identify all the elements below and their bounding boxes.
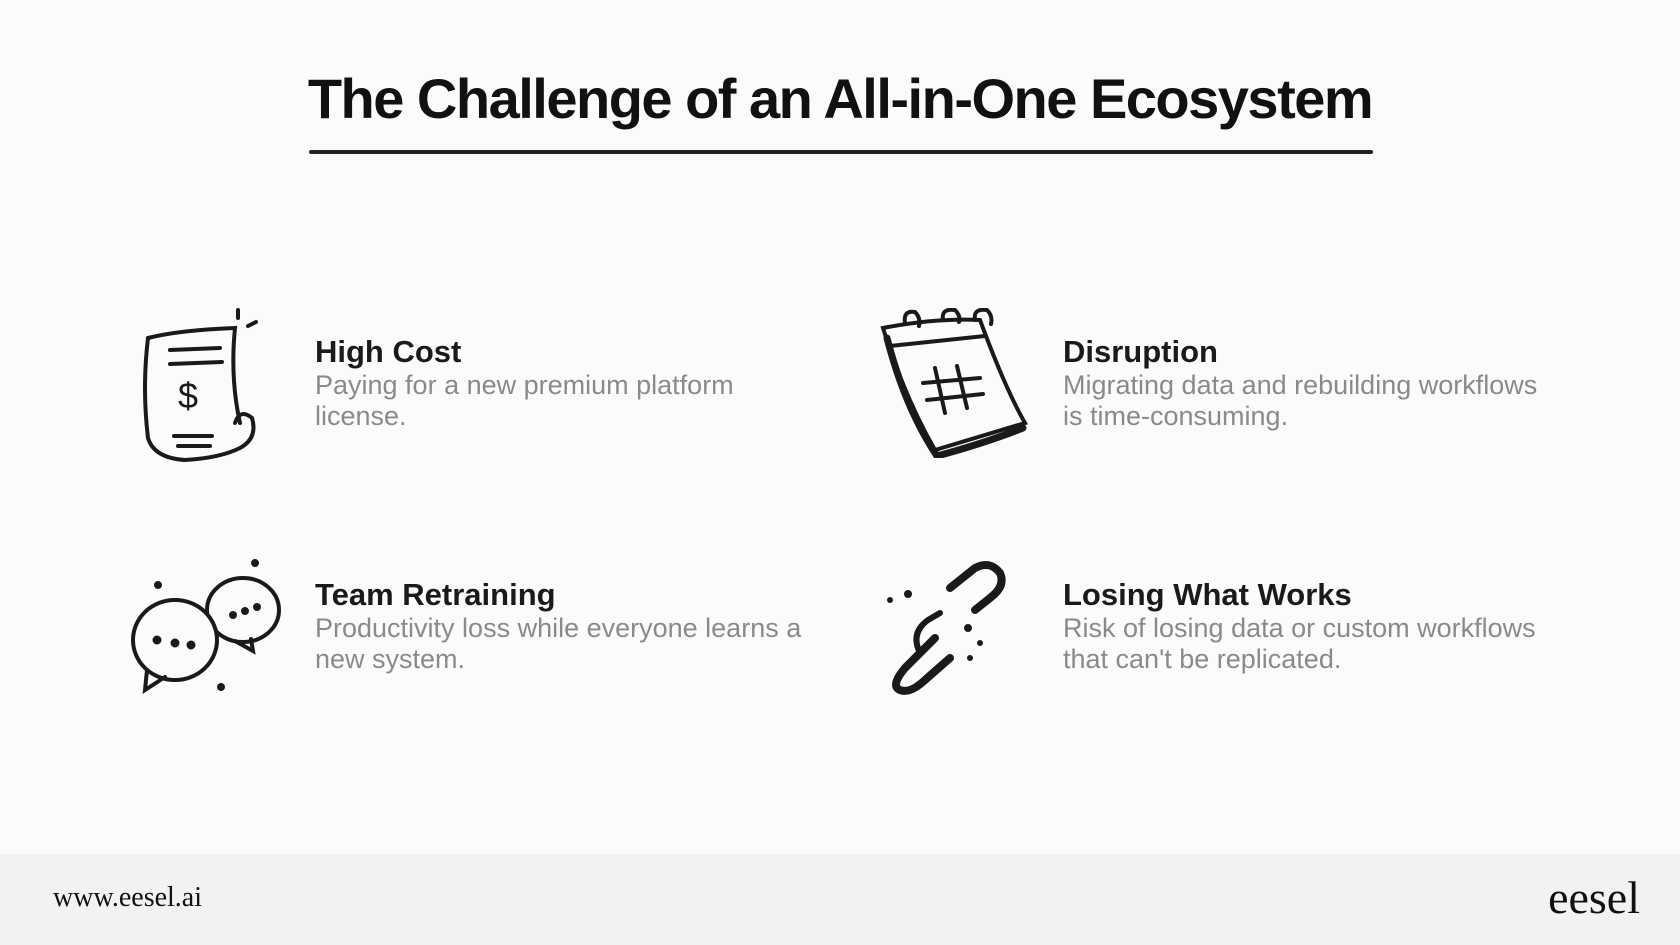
footer url: www.eesel.ai [53,882,202,913]
title underline [309,150,1373,154]
icon: bill with dollar [143,308,258,462]
item: Team Retraining: Productivity loss while everyone learns a [315,613,801,643]
item: Disruption: Migrating data and rebuilding workflows [1063,370,1537,400]
item: Losing What Works: that can't be replicated. [1063,644,1341,674]
item: Losing What Works [1063,577,1536,674]
item: High Cost: Paying for a new premium platform [315,370,734,400]
item: Team Retraining: Team Retraining [315,577,556,612]
item: Losing What Works: Risk of losing data or custom workflows [1063,613,1536,643]
item: Team Retraining: new system. [315,644,465,674]
item: High Cost [315,334,734,431]
item: Team Retraining [315,577,802,674]
icon: bill with dollar: $ [178,375,198,416]
footer [0,854,1680,945]
item: Losing What Works: Losing What Works [1063,577,1352,612]
item: Disruption [1063,334,1537,431]
icon: chat bubbles [131,559,281,694]
title: The Challenge of an All-in-One Ecosystem [308,67,1372,130]
icon: calendar [880,308,1028,458]
item: High Cost: High Cost [315,334,461,369]
icon: broken chain [887,561,1006,695]
item: High Cost: license. [315,401,407,431]
item: Disruption: Disruption [1063,334,1218,369]
footer logo: eesel [1548,872,1640,923]
item: Disruption: is time-consuming. [1063,401,1288,431]
